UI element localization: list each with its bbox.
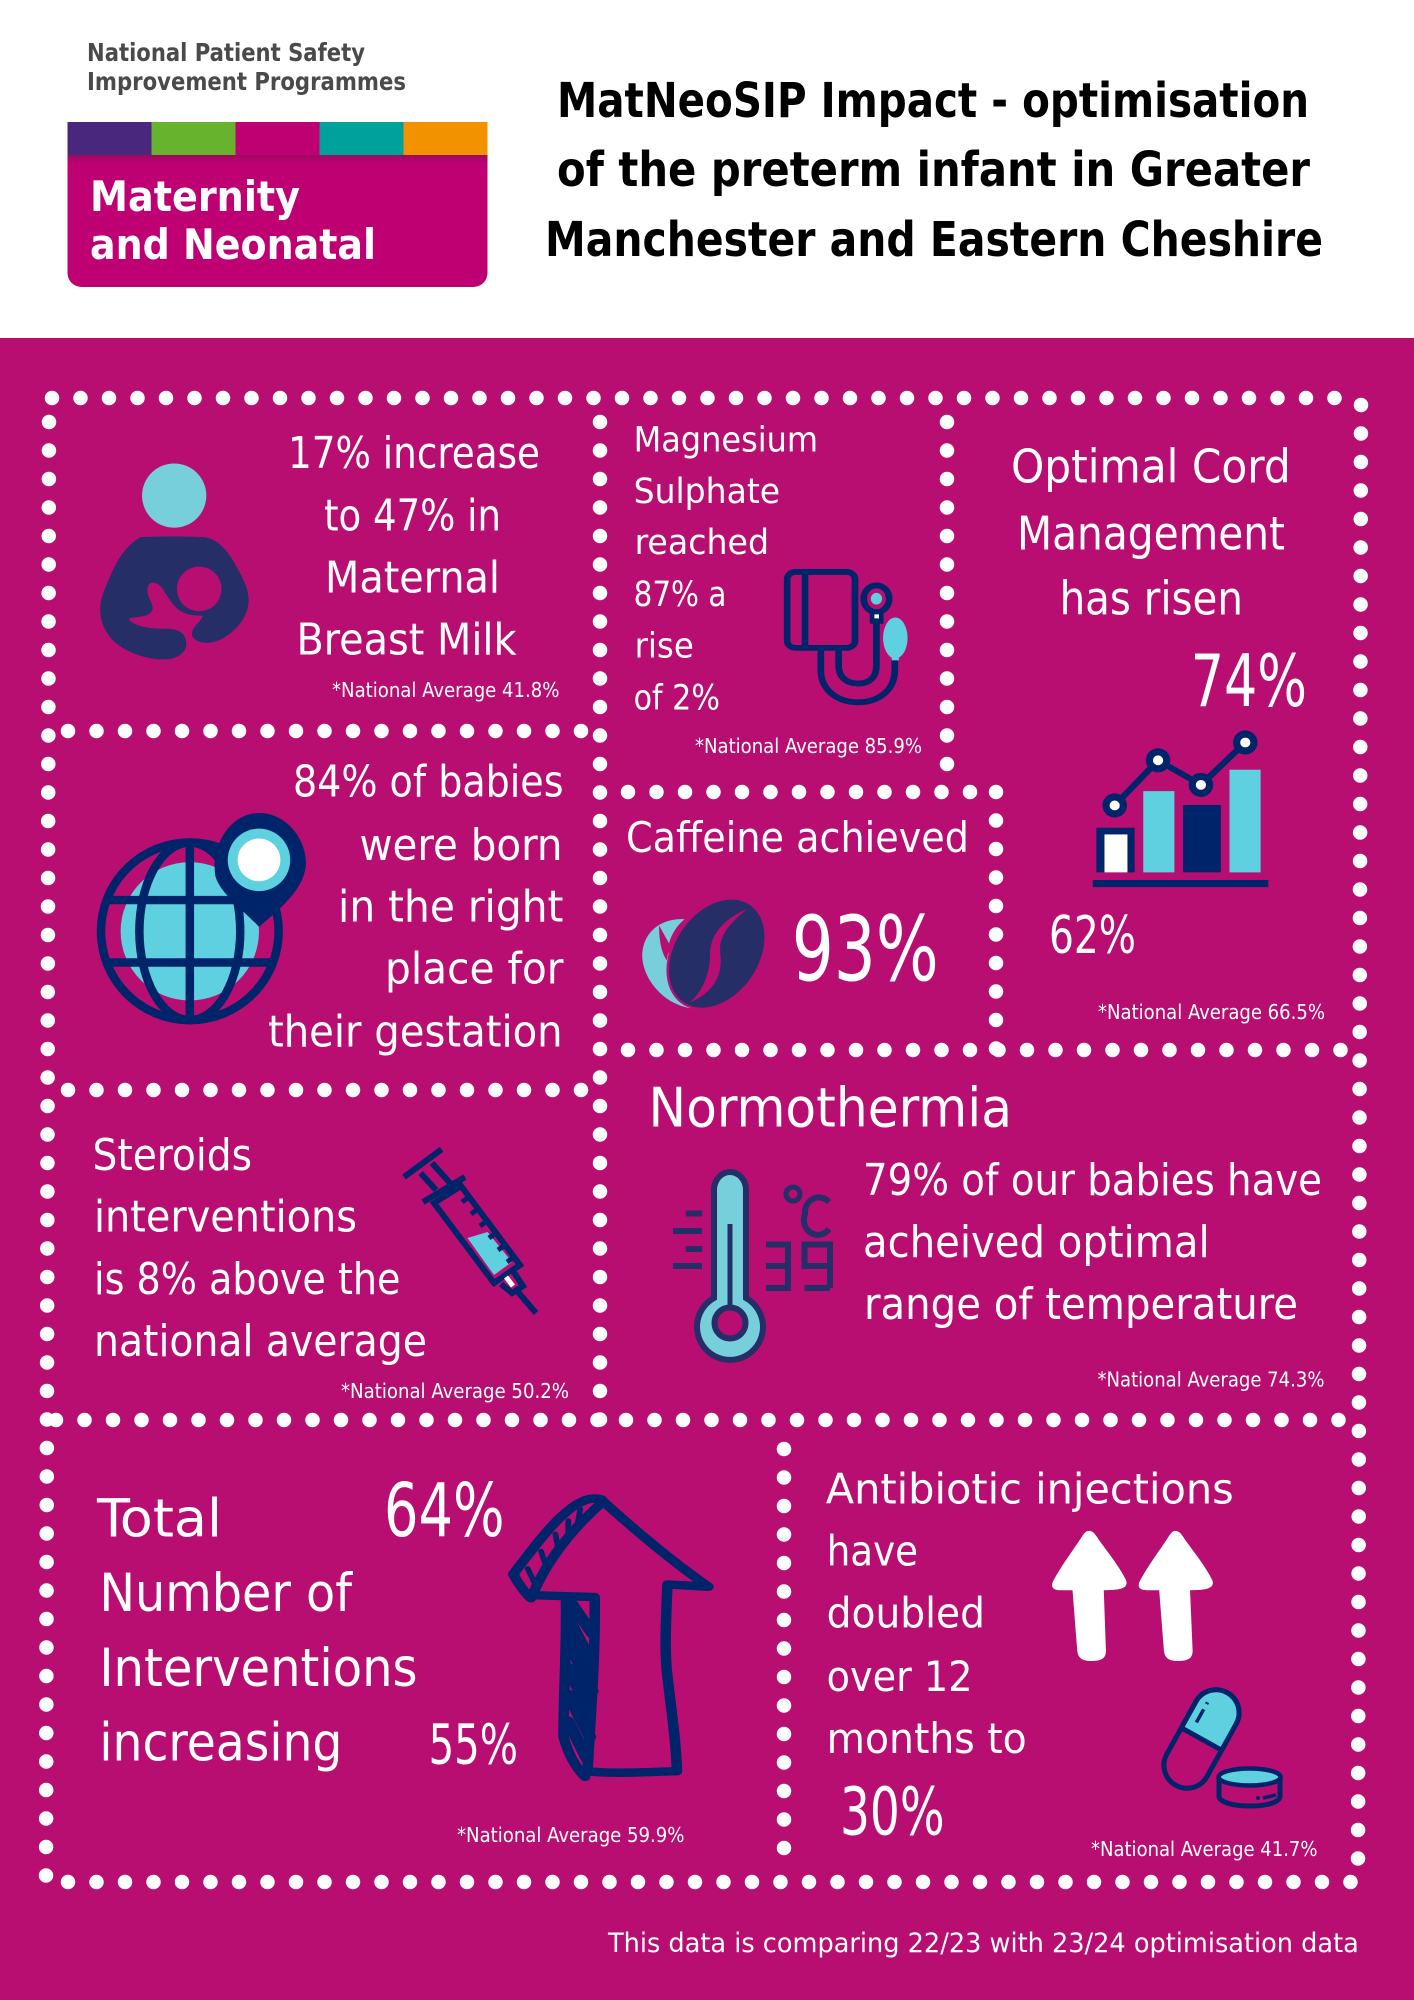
text: cord management statistic: Optimal Cord — [1011, 440, 1291, 494]
text: normothermia statistic: 79% of our babies have — [863, 1155, 1322, 1206]
text: magnesium statistic: reached — [635, 523, 769, 563]
panel: maternal breast milk — [100, 428, 560, 702]
figure: 62%: 62% — [1049, 906, 1136, 966]
note: national average 50.2%: *National Average 50.2% — [341, 1379, 569, 1403]
text: magnesium statistic: Sulphate — [634, 472, 780, 512]
figure: 55%: 55% — [429, 1713, 518, 1777]
text: cord management statistic — [1011, 440, 1291, 625]
text: total number of interventions increasing: Number of — [99, 1563, 353, 1624]
icon: capsule and tablet — [1156, 1681, 1281, 1806]
text: antibiotic statistic: doubled — [827, 1589, 985, 1638]
text: magnesium statistic: 87% a — [634, 575, 726, 615]
panel: magnesium sulphate — [634, 420, 922, 758]
text: right place statistic: place for — [385, 944, 564, 994]
text: total number of interventions increasing: increasing — [99, 1712, 342, 1774]
title: MatNeoSIP Impact - optimisation — [557, 73, 1309, 129]
note: national average 41.8%: *National Average 41.8% — [332, 678, 560, 702]
text: magnesium statistic: Magnesium — [634, 420, 818, 460]
panel: steroids — [92, 1130, 569, 1403]
text: magnesium statistic — [634, 420, 818, 718]
text: total number of interventions increasing — [96, 1489, 418, 1774]
text: antibiotic statistic: months to — [827, 1714, 1027, 1763]
text: antibiotic statistic: over 12 — [827, 1652, 972, 1701]
note: national average 66.5%: *National Average 66.5% — [1098, 1000, 1325, 1024]
heading: caffeine achieved: Caffeine achieved — [626, 813, 969, 862]
text: normothermia statistic: acheived optimal — [863, 1217, 1210, 1268]
figure: 74%: 74% — [1191, 639, 1307, 723]
note: national average 41.7%: *National Average 41.7% — [1091, 1837, 1318, 1861]
figure: 30%: 30% — [840, 1773, 945, 1850]
text: right place statistic: were born — [360, 820, 562, 871]
title: of the preterm infant in Greater — [557, 142, 1311, 198]
text: breast milk statistic — [288, 428, 540, 666]
text: cord management statistic: Management — [1017, 507, 1285, 561]
figure: 93%: 93% — [792, 897, 939, 1002]
logo: National Patient Safety Improvement Programmes: National Patient Safety — [87, 38, 365, 67]
text: total number of interventions increasing: Total — [96, 1489, 222, 1550]
text: steroids statistic — [92, 1130, 427, 1367]
text: antibiotic statistic — [826, 1464, 1234, 1763]
text: antibiotic statistic: have — [827, 1526, 918, 1575]
text: normothermia statistic — [863, 1155, 1322, 1330]
note: national average 74.3%: *National Average 74.3% — [1098, 1368, 1324, 1392]
icon: syringe — [404, 1149, 536, 1313]
panel: caffeine — [626, 813, 969, 1023]
note: national average 85.9%: *National Average 85.9% — [695, 734, 922, 758]
text: normothermia statistic: range of temperature — [864, 1279, 1298, 1330]
icon: hand-drawn up arrow — [513, 1499, 709, 1777]
note: national average 59.9%: *National Average 59.9% — [457, 1823, 684, 1847]
icon: thermometer — [673, 1172, 830, 1360]
icon: breastfeeding mother — [100, 463, 249, 660]
logo: National Patient Safety Improvement Programmes — [68, 38, 488, 287]
logo: National Patient Safety Improvement Programmes: and Neonatal — [90, 220, 376, 269]
text: right place statistic — [268, 756, 564, 1058]
icon: blood pressure cuff — [787, 572, 908, 702]
title: Manchester and Eastern Cheshire — [545, 212, 1323, 268]
panel: total interventions — [96, 1468, 709, 1847]
text: right place statistic: 84% of babies — [293, 756, 564, 808]
text: magnesium statistic: of 2% — [634, 678, 720, 718]
icon: globe with location pin — [101, 813, 306, 1020]
text: steroids statistic: is 8% above the — [94, 1254, 400, 1305]
heading: normothermia: Normothermia — [648, 1077, 1012, 1140]
text: steroids statistic: national average — [94, 1316, 427, 1367]
text: breast milk statistic: to 47% in — [324, 490, 501, 542]
footer note: This data is comparing 22/23 with 23/24 optimisation data — [607, 1928, 1359, 1959]
text: breast milk statistic: Breast Milk — [296, 614, 517, 666]
icon: coffee bean — [642, 885, 785, 1023]
text: breast milk statistic: 17% increase — [288, 428, 540, 479]
logo: National Patient Safety Improvement Programmes: Improvement Programmes — [87, 67, 406, 96]
text: steroids statistic: interventions — [94, 1192, 357, 1243]
logo: National Patient Safety Improvement Programmes: Maternity — [90, 172, 300, 221]
text: magnesium statistic: rise — [635, 627, 694, 667]
panel: normothermia — [648, 1077, 1324, 1392]
text: right place statistic: their gestation — [268, 1006, 563, 1058]
text: right place statistic: in the right — [338, 882, 564, 932]
text: total number of interventions increasing: Interventions — [99, 1638, 418, 1699]
text: steroids statistic: Steroids — [92, 1130, 252, 1181]
title — [545, 73, 1323, 268]
panel: right place of birth — [101, 756, 564, 1058]
text: breast milk statistic: Maternal — [325, 552, 500, 604]
icon: two white up arrows — [1052, 1531, 1213, 1661]
panel: optimal cord management — [1011, 440, 1325, 1024]
panel: antibiotic injections — [826, 1464, 1318, 1861]
text: antibiotic statistic: Antibiotic injections — [826, 1464, 1234, 1513]
text: cord management statistic: has risen — [1060, 571, 1243, 625]
figure: 64%: 64% — [384, 1468, 505, 1554]
icon: rising bar and line chart — [1093, 730, 1268, 887]
